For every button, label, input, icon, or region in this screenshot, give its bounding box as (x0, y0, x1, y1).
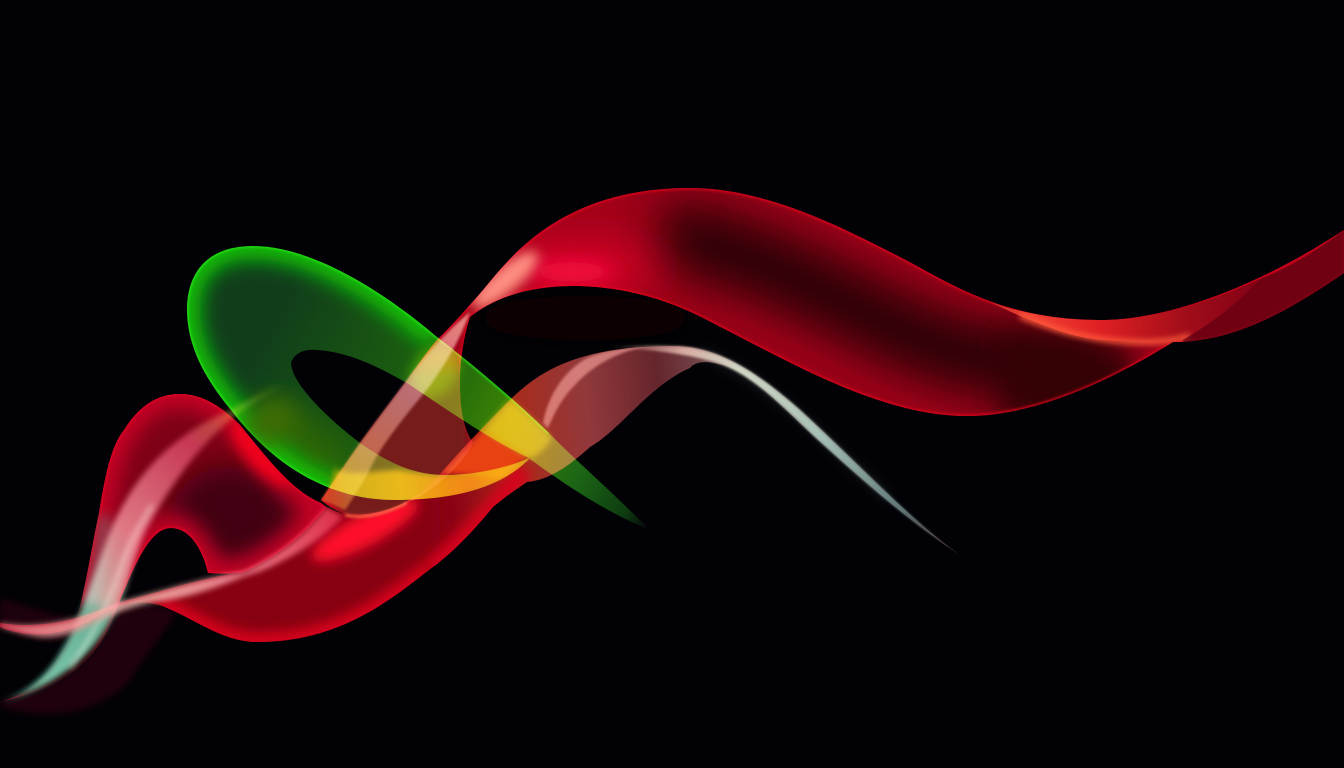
big red ribbon (321, 188, 1344, 516)
faint shadow ribbon lower left (0, 598, 178, 714)
pale translucent highlight bands (0, 312, 470, 702)
white core of the hump band (70, 505, 152, 668)
yellow overlap highlights (345, 400, 552, 517)
green loop ribbon (187, 246, 646, 528)
dark red lower left fold (340, 370, 470, 520)
red lower ribbon rising to the white tail (0, 344, 959, 642)
band on the lower ribbon (0, 507, 343, 637)
faint maroon glow behind the ribbons (475, 296, 695, 340)
pink fold inside mid ribbon (543, 347, 645, 428)
band on the hump (0, 385, 283, 702)
artwork: glowing ribbons on black (0, 188, 1344, 716)
glow around the tail (700, 352, 890, 500)
fold band of the right tail (967, 278, 1262, 343)
dim right tail end (1183, 230, 1344, 342)
band across the big ribbon (321, 312, 470, 510)
tail of the lower ribbon (607, 345, 960, 555)
gold band at the base of the loop (326, 458, 528, 500)
red hump ribbon at left (1, 394, 326, 702)
